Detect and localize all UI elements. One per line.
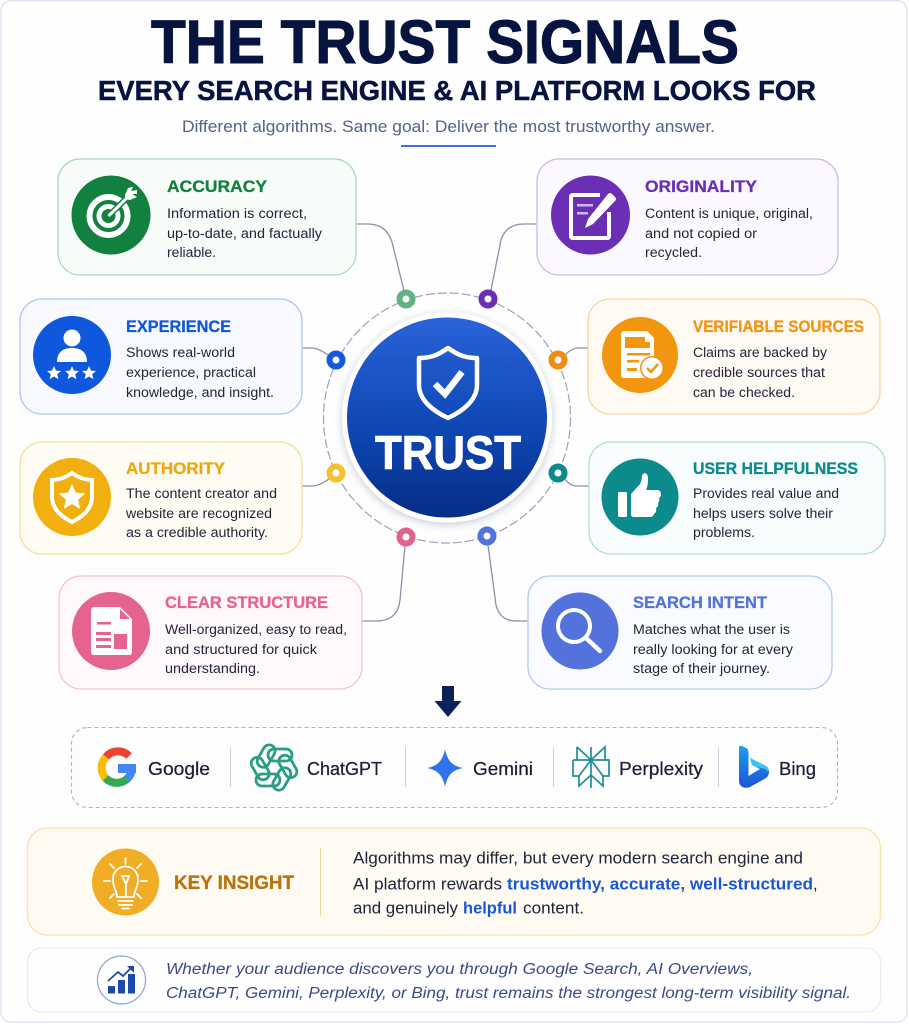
panel: verifiable sources: can be checked. xyxy=(693,385,795,400)
connectors xyxy=(302,224,589,621)
panel: user helpfulness: Provides real value and xyxy=(693,486,839,501)
icon: growth chart xyxy=(98,956,146,1004)
icon: shield with star xyxy=(33,458,111,536)
icon: bing xyxy=(739,746,769,788)
panel: authority: as a credible authority. xyxy=(126,525,268,540)
icon: document layout xyxy=(72,592,150,670)
panel: search intent: SEARCH INTENT xyxy=(633,593,768,612)
panel: originality: recycled. xyxy=(645,245,702,260)
panel: authority: The content creator and xyxy=(126,486,277,501)
label: bing: Bing xyxy=(779,759,816,779)
icon: chatgpt xyxy=(249,743,299,792)
panel: search intent: stage of their journey. xyxy=(633,661,770,676)
icon: document with check xyxy=(602,317,678,393)
title: EVERY SEARCH ENGINE & AI PLATFORM LOOKS FOR xyxy=(98,75,816,106)
panel: verifiable sources xyxy=(588,299,880,414)
heading: key insight: KEY INSIGHT xyxy=(174,873,294,894)
label: chatgpt: ChatGPT xyxy=(307,759,382,779)
panel: experience: Shows real-world xyxy=(126,345,235,360)
panel: clear structure: and structured for quick xyxy=(165,642,317,657)
panel: clear structure: understanding. xyxy=(165,661,260,676)
panel: authority: AUTHORITY xyxy=(126,459,226,478)
panel: user helpfulness: problems. xyxy=(693,525,755,540)
panel: key insight xyxy=(28,828,880,935)
insight text: content. xyxy=(523,900,584,918)
closing text: Whether your audience discovers you through Google Search, AI Overviews, xyxy=(166,961,753,978)
label: gemini: Gemini xyxy=(473,759,533,779)
title xyxy=(98,8,816,106)
insight text xyxy=(353,850,818,918)
icon: light bulb xyxy=(92,848,159,916)
panel: search intent xyxy=(528,576,832,689)
panel: experience xyxy=(20,299,302,414)
icon: perplexity xyxy=(573,747,609,788)
icon: thumbs up xyxy=(602,458,678,536)
insight text: AI platform rewards xyxy=(353,876,502,894)
panel: accuracy: up-to-date, and factually xyxy=(167,226,322,241)
panel: verifiable sources: VERIFIABLE SOURCES xyxy=(693,317,864,336)
panel: verifiable sources: Claims are backed by xyxy=(693,345,827,360)
central trust emblem xyxy=(324,293,570,543)
panel: clear structure xyxy=(59,576,362,689)
label: perplexity: Perplexity xyxy=(619,759,703,779)
connector nodes xyxy=(330,292,564,544)
icon: person with stars xyxy=(33,316,111,394)
panel: originality: and not copied or xyxy=(645,226,758,241)
panel: accuracy: Information is correct, xyxy=(167,206,307,221)
insight text: trustworthy, accurate, well-structured xyxy=(507,876,813,894)
icon: gemini xyxy=(427,749,463,787)
trust label: TRUST xyxy=(375,426,521,479)
arrow: down to platforms xyxy=(434,686,462,717)
platform dividers xyxy=(230,747,718,787)
panel: authority: website are recognized xyxy=(125,506,272,521)
panel: originality: ORIGINALITY xyxy=(645,177,758,196)
dashed orbit ring xyxy=(324,293,570,543)
closing text: ChatGPT, Gemini, Perplexity, or Bing, trust remains the strongest long-term visibility signal. xyxy=(166,985,851,1002)
panel: user helpfulness: USER HELPFULNESS xyxy=(693,459,858,478)
panel: accuracy: reliable. xyxy=(167,245,216,260)
panel: closing statement xyxy=(28,948,880,1012)
panel: user helpfulness xyxy=(589,442,885,554)
panel: experience: experience, practical xyxy=(126,365,256,380)
panel: search intent: Matches what the user is xyxy=(633,622,790,637)
insight text: , xyxy=(813,876,818,894)
panel: originality xyxy=(537,159,838,275)
panel: clear structure: CLEAR STRUCTURE xyxy=(165,593,328,612)
panel: verifiable sources: credible sources that xyxy=(693,365,825,380)
icon: target xyxy=(72,176,150,254)
label: google: Google xyxy=(148,759,210,779)
icon: shield with check xyxy=(419,348,477,418)
title: THE TRUST SIGNALS xyxy=(151,8,739,77)
icon: note and pencil xyxy=(551,176,630,254)
insight text: Algorithms may differ, but every modern search engine and xyxy=(353,850,803,868)
insight text: and genuinely xyxy=(353,900,459,918)
subtitle underline xyxy=(401,145,496,147)
panel: authority xyxy=(20,442,302,554)
trust disc xyxy=(342,312,552,522)
panel: user helpfulness: helps users solve their xyxy=(693,506,834,521)
panel: originality: Content is unique, original, xyxy=(645,206,813,221)
insight text: helpful xyxy=(463,900,517,918)
subtitle: Different algorithms. Same goal: Deliver the most trustworthy answer. xyxy=(182,117,715,136)
panel: accuracy xyxy=(58,159,356,275)
panel: experience: knowledge, and insight. xyxy=(126,385,274,400)
icon: google xyxy=(102,751,136,783)
panel: accuracy: ACCURACY xyxy=(167,177,268,196)
closing text xyxy=(166,961,851,1002)
panel: platforms xyxy=(72,728,838,808)
panel: clear structure: Well-organized, easy to read, xyxy=(165,622,347,637)
icon: magnifier xyxy=(542,592,618,670)
panel: search intent: really looking for at every xyxy=(633,642,793,657)
panel: experience: EXPERIENCE xyxy=(126,317,231,336)
